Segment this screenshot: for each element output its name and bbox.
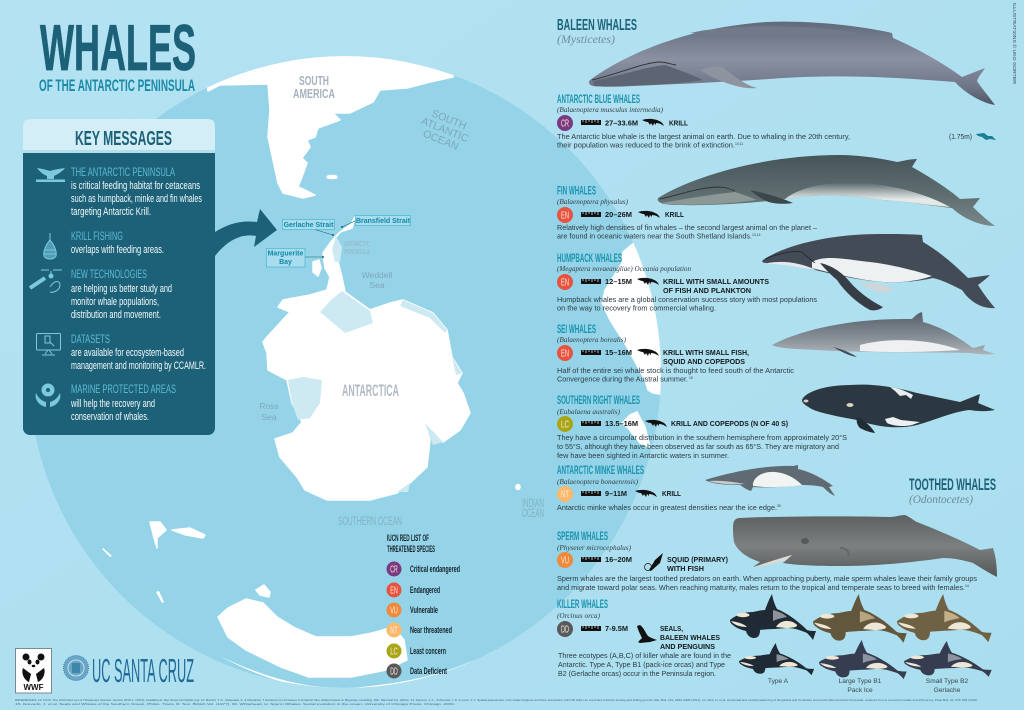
text: new technologies: monitor whale populations,	[71, 296, 159, 308]
label: Ross Sea: Ross	[259, 401, 279, 411]
title	[39, 11, 196, 95]
icon: length ruler	[581, 350, 601, 355]
text block: southern right whale: to 55°S, although they have been observed as far south as 65°S. They are migratory and	[557, 442, 839, 451]
icon: krill	[637, 278, 659, 285]
whale: southern right whale	[802, 385, 995, 433]
label: Weddell Sea: Weddell	[362, 270, 392, 280]
text block: Antarctic minke whale: KRILL	[662, 489, 681, 498]
map: Australia	[218, 599, 407, 677]
callout: Marguerite Bay: Bay	[279, 259, 292, 266]
map: New Zealand	[150, 522, 205, 548]
text block: southern right whale: SOUTHERN RIGHT WHALES	[557, 395, 640, 407]
text block: sperm whale: SPERM WHALES	[557, 531, 608, 543]
legend: near threatened	[386, 622, 452, 638]
text block: Antarctic blue whale: 27–33.6M	[605, 118, 638, 128]
legend: critical endangered: CR	[390, 564, 398, 576]
caption: Type A: Type A	[768, 678, 789, 685]
icon: monitor	[36, 334, 60, 355]
badge: NT	[557, 486, 573, 502]
badge: DD: DD	[561, 624, 569, 636]
badge: EN	[557, 207, 573, 223]
legend: endangered: Endangered	[410, 585, 440, 595]
label: Indian Ocean	[522, 498, 544, 520]
text block: fin whale: 20–26M	[605, 210, 632, 219]
text block: sei whale	[557, 324, 794, 384]
whale: sperm whale	[733, 515, 997, 577]
text block: humpback whale: (Megaptera novaeangliae) Oceania population	[557, 264, 691, 273]
icon: length ruler	[581, 557, 601, 562]
orca: Large Type B1 juvenile	[819, 640, 907, 679]
icon: length ruler	[581, 421, 601, 426]
text: new technologies: distribution and movement.	[71, 309, 161, 321]
text: new technologies: are helping us better study and	[71, 283, 172, 295]
text block: sperm whale: (Physeter microcephalus)	[557, 543, 631, 552]
icon: new technologies	[30, 270, 62, 292]
callout: Marguerite Bay: Marguerite	[268, 250, 303, 258]
icon: krill	[642, 119, 664, 126]
text block: killer whale: SEALS,	[660, 624, 683, 633]
subtitle: OF THE ANTARCTIC PENINSULA	[39, 77, 195, 95]
legend: endangered: EN	[390, 586, 398, 596]
text: the Antarctic Peninsula: is critical feeding habitat for cetaceans	[71, 180, 200, 192]
text block: killer whale: AND PENGUINS	[660, 642, 715, 651]
text: marine protected areas	[70, 382, 176, 423]
text: datasets: are available for ecosystem-based	[71, 347, 184, 359]
text block: sperm whale: 14	[965, 584, 969, 588]
legend: critical endangered	[386, 562, 460, 576]
text block: humpback whale: on the way to recovery from commercial whaling.	[557, 304, 716, 312]
text block: humpback whale: Humpback whales are a global conservation success story with most populations	[557, 295, 817, 304]
text: krill fishing: overlaps with feeding areas.	[71, 244, 164, 256]
orca: Large Type B1 adult	[813, 594, 907, 643]
text block: fin whale: (Balaenoptera physalus)	[557, 197, 628, 206]
whale: fin whale	[658, 155, 995, 226]
badge: LC: LC	[561, 420, 569, 430]
icon: whale tail	[36, 168, 65, 182]
text block: fin whale: FIN WHALES	[557, 186, 596, 198]
text block: sei whale: Half of the entire sei whale stock is thought to feed south of the Antarctic	[557, 366, 794, 375]
text block: Antarctic blue whale: ANTARCTIC BLUE WHALES	[557, 94, 640, 106]
text: datasets: DATASETS	[71, 332, 110, 346]
scale: diver: (1.75m)	[949, 132, 972, 141]
legend: least concern: LC	[390, 646, 398, 658]
label: South Atlantic Ocean: ATLANTIC	[419, 115, 471, 145]
map: Tasmania	[256, 585, 270, 597]
callout: Marguerite Bay	[266, 248, 324, 267]
text block: Antarctic minke whale: ANTARCTIC MINKE WHALES	[557, 465, 644, 477]
text: marine protected areas: will help the recovery and	[70, 398, 155, 410]
references	[15, 698, 978, 706]
legend: vulnerable: Vulnerable	[410, 605, 438, 615]
map: Antarctica	[263, 217, 470, 500]
text block: sperm whale: 16–20M	[605, 555, 632, 564]
text block: sperm whale: WITH FISH	[667, 564, 704, 573]
legend: IUCN red list	[386, 533, 460, 678]
legend: vulnerable: VU	[390, 606, 398, 616]
text block: fin whale: KRILL	[665, 210, 684, 219]
text: datasets	[71, 332, 206, 372]
logo: UC Santa Cruz	[64, 652, 194, 689]
label: Ross Sea: Sea	[261, 412, 277, 422]
credit: illustrations: ILLUSTRATIONS © UKO GORTER	[1011, 3, 1018, 85]
callout: Bransfield Strait: Bransfield Strait	[356, 218, 411, 225]
badge: EN: EN	[561, 348, 569, 360]
whale: humpback whale	[762, 234, 995, 310]
icon: hands and protected area	[36, 384, 60, 407]
legend: data deficient	[386, 664, 447, 678]
text: UC SANTA CRUZ	[92, 652, 194, 689]
heading: baleen whales: BALEEN WHALES	[557, 17, 637, 34]
text block: southern right whale: (Eubalaena australis)	[557, 407, 620, 416]
text block: sperm whale: SQUID (PRIMARY)	[667, 555, 728, 564]
panel: key messages	[23, 119, 215, 435]
text block: Antarctic blue whale: (Balaenoptera musculus intermedia)	[557, 105, 663, 114]
badge: CR	[557, 115, 573, 131]
text block: killer whale: Antarctic. Type A, Type B1 (pack-ice orcas) and Type	[558, 660, 725, 669]
heading: baleen whales	[557, 17, 637, 46]
arrow to the peninsula	[215, 209, 277, 256]
text block: humpback whale: KRILL WITH SMALL AMOUNTS	[663, 277, 769, 286]
text block: sei whale: Convergence during the Austral summer.	[557, 374, 688, 384]
icon: length ruler	[581, 626, 601, 631]
label: Weddell Sea	[362, 270, 392, 290]
callout: Bransfield Strait	[341, 216, 411, 228]
text: datasets: management and monitoring by CCAMLR.	[71, 360, 206, 372]
badge: NT: NT	[561, 490, 569, 500]
text block: Antarctic minke whale: 30	[777, 504, 781, 508]
badge: CR: CR	[561, 118, 569, 130]
map: Falkland Islands	[327, 176, 337, 178]
label: Antarctic Peninsula	[344, 241, 370, 256]
label: Antarctica: ANTARCTICA	[342, 382, 399, 400]
references: 15. Acevedo, J. et al. Seals and Whales of the Southern Ocean. Philos. Trans. R. Soc. British Vol. (1977). 30. Whitehead, H. Sperm Whales. Social evolution in the ocean. University of Chicago Press, Chicago. 2003.	[15, 702, 455, 706]
callout: Gerlache Strait	[282, 220, 334, 236]
icon: length ruler	[581, 212, 601, 217]
icon: krill	[645, 420, 667, 427]
badge: EN	[557, 345, 573, 361]
map: southern coast crescent	[102, 548, 474, 691]
text block: humpback whale	[557, 253, 817, 312]
title: WHALES	[40, 11, 196, 84]
callout: Gerlache Strait: Gerlache Strait	[284, 222, 334, 229]
whale: Antarctic blue whale	[589, 22, 995, 105]
label: Weddell Sea: Sea	[369, 280, 385, 290]
icon: seal	[637, 625, 657, 643]
logo: WWF: WWF	[24, 683, 44, 692]
orcas: killer whale ecotypes	[730, 594, 992, 694]
caption: Small Type B2: Small Type B2	[926, 678, 969, 685]
badge: DD	[557, 621, 573, 637]
badge: VU	[557, 552, 573, 568]
text block: sperm whale: Sperm whales are the largest toothed predators on earth. When approaching puberty, male sperm whales leave their family groups	[557, 574, 977, 583]
text block: humpback whale: OF FISH AND PLANKTON	[663, 286, 751, 295]
icon: krill	[638, 211, 660, 218]
text block: killer whale: Three ecotypes (A,B,C) of killer whale are found in the	[558, 651, 731, 660]
text block: humpback whale: 12–15M	[605, 277, 632, 286]
legend: data deficient: Data Deficient	[410, 666, 447, 676]
badge: EN: EN	[561, 278, 569, 288]
text block: sei whale: 15	[689, 376, 693, 380]
text: the Antarctic Peninsula: THE ANTARCTIC PENINSULA	[71, 165, 175, 179]
orca: Small Type B2 juvenile	[904, 641, 992, 677]
text block: Antarctic blue whale: The Antarctic blue whale is the largest animal on earth. Due to whaling in the 20th century,	[557, 132, 850, 141]
orca: Small Type B2 adult	[897, 594, 992, 642]
icon: krill net	[44, 233, 56, 259]
text block: sperm whale: and migrate toward polar seas. When reaching maturity, males return to the tropical and temperate seas to breed with females.	[557, 583, 965, 592]
badge: VU: VU	[561, 556, 569, 566]
text: the Antarctic Peninsula	[71, 165, 202, 218]
legend heading: IUCN RED LIST OF	[387, 533, 429, 544]
badge: EN	[557, 274, 573, 290]
label: Indian Ocean: INDIAN	[522, 498, 544, 510]
label: South Atlantic Ocean: OCEAN	[421, 128, 460, 153]
text: the Antarctic Peninsula: such as humpback, minke and fin whales	[71, 193, 202, 205]
text block: Antarctic blue whale	[557, 94, 850, 150]
text block: sei whale: (Balaenoptera borealis)	[557, 335, 626, 344]
label: South America: AMERICA	[293, 86, 335, 101]
caption: Small Type B2: Gerlache	[934, 687, 961, 694]
text block: killer whale	[557, 599, 731, 678]
map labels	[259, 73, 544, 528]
orca: Type A adult	[730, 594, 816, 640]
icon: krill	[637, 349, 659, 356]
label: South America	[293, 73, 335, 101]
text block: Antarctic minke whale: 9–11M	[605, 489, 627, 498]
text block: sei whale: SEI WHALES	[557, 324, 596, 336]
label: Ross Sea	[259, 401, 279, 422]
text block: sei whale: KRILL WITH SMALL FISH,	[663, 348, 749, 357]
map: ice shelves	[288, 236, 462, 492]
text block: sei whale: 15–16M	[605, 348, 632, 357]
icon: length ruler	[581, 120, 601, 125]
label: Southern Ocean: SOUTHERN OCEAN	[338, 516, 402, 528]
text block: southern right whale: They have a circumpolar distribution in the southern hemisphere from approximately 20°S	[557, 433, 847, 442]
label: Indian Ocean: OCEAN	[522, 508, 544, 520]
text: marine protected areas: MARINE PROTECTED AREAS	[71, 382, 176, 396]
text block: sei whale: SQUID AND COPEPODS	[663, 357, 745, 366]
text block: fin whale: are found in oceanic waters near the South Shetland Islands.	[557, 232, 752, 241]
references: REFERENCES: 10. IUCN. The IUCN Red List of Threatened Species. Version 2019-1. (2019). Available at: http://www.iucnredlist.org/. 11. Branch, T. A., Matsuoka, K. & Miyashita, T. Evidence for increases in Antarctic blue whales based on Bayesian modelling. Mar. Mammal Sci. (2004). 13. Santora, J. A., Schroeder, I. D. & Loeb, V. J. Spatial assessment of fin whale hotspots and their association with krill within an important Antarctic feeding and fishing ground. Mar. Biol. 161, 2293–2305 (2014). 14. Weir, H. et al. Horizontal and vertical patterning of humpback and fin whales around the West Antarctic Peninsula: evidence from a concurrent whale and krill survey. Polar Biol. 33, 979–993 (2010).	[15, 698, 978, 702]
text block: southern right whale: KRILL AND COPEPODS (N OF 40 S)	[671, 419, 788, 428]
text block: killer whale: 7-9.5M	[605, 624, 628, 633]
orca: Type A juvenile	[739, 643, 814, 675]
legend heading	[387, 533, 435, 555]
text block: southern right whale	[557, 395, 847, 460]
icon: length ruler	[581, 279, 601, 284]
text: krill fishing: KRILL FISHING	[71, 229, 123, 243]
legend: endangered	[386, 582, 440, 598]
text block: killer whale: KILLER WHALES	[557, 599, 608, 611]
text block: sperm whale	[557, 531, 977, 592]
legend: least concern	[386, 644, 446, 658]
text: marine protected areas: conservation of whales.	[71, 411, 149, 423]
map: globe of the Southern Ocean	[36, 56, 661, 688]
badge: LC	[557, 416, 573, 432]
label: Antarctic Peninsula: ANTARCTIC	[344, 241, 370, 248]
text block: fin whale: Relatively high densities of fin whales – the second largest animal on the planet –	[557, 223, 818, 232]
text: the Antarctic Peninsula: targeting Antarctic Krill.	[71, 206, 151, 218]
logo: WWF	[16, 648, 52, 693]
badge: EN: EN	[561, 210, 569, 222]
label: South Atlantic Ocean: SOUTH	[430, 108, 468, 132]
icon: squid	[644, 553, 663, 571]
caption: Small Type B2	[926, 678, 969, 694]
text: new technologies	[71, 267, 172, 321]
whale: sei whale	[772, 312, 995, 357]
label: South Atlantic Ocean	[415, 105, 475, 155]
text block: Antarctic blue whale: 10,11	[735, 142, 743, 146]
icon: krill	[635, 490, 657, 497]
heading: toothed whales: (Odontocetes)	[909, 492, 973, 506]
legend: vulnerable	[386, 602, 438, 618]
legend: data deficient: DD	[390, 666, 398, 678]
map: Africa	[601, 242, 661, 395]
whale: Antarctic minke whale	[705, 465, 835, 496]
caption: Large Type B1	[839, 678, 882, 694]
label: South America: SOUTH	[299, 73, 329, 88]
text block: Antarctic minke whale	[557, 465, 781, 512]
text block: fin whale	[557, 186, 818, 241]
heading: baleen whales: (Mysticetes)	[557, 34, 615, 46]
legend: least concern: Least concern	[410, 646, 446, 656]
heading: toothed whales	[909, 475, 996, 506]
text block: killer whale: (Orcinus orca)	[557, 611, 600, 620]
text block: Antarctic minke whale: Antarctic minke whales occur in greatest densities near the ice edge.	[557, 503, 777, 512]
label: Antarctic Peninsula: PENINSULA	[344, 249, 370, 256]
caption: Large Type B1: Pack Ice	[847, 687, 873, 694]
text block: Antarctic blue whale: their population was reduced to the brink of extinction.	[557, 140, 735, 150]
legend: IUCN red list: THREATENED SPECIES	[387, 544, 435, 555]
text block: fin whale: 13,14	[752, 233, 761, 237]
text block: southern right whale: 13.5–16M	[605, 419, 638, 428]
text block: killer whale: BALEEN WHALES	[660, 633, 720, 642]
heading: key messages: KEY MESSAGES	[75, 128, 172, 150]
caption: Large Type B1: Large Type B1	[839, 678, 882, 685]
text block: Antarctic minke whale: (Balaenoptera bonaerensis)	[557, 477, 638, 486]
map: Indian Ocean island	[516, 484, 520, 490]
text block: Antarctic blue whale: KRILL	[669, 118, 688, 128]
text block: humpback whale: HUMPBACK WHALES	[557, 253, 622, 265]
text block: southern right whale: few have been sighted in Antarctic waters in summer.	[557, 451, 729, 460]
map: Alexander Island	[313, 260, 321, 276]
scale: diver	[949, 132, 996, 141]
icon: length ruler	[581, 491, 601, 496]
text: new technologies: NEW TECHNOLOGIES	[71, 267, 147, 281]
legend: near threatened: Near threatened	[410, 625, 452, 635]
legend: critical endangered: Critical endangered	[410, 564, 460, 574]
map: South America	[206, 56, 454, 199]
text block: killer whale: B2 (Gerlache orcas) occur in the Peninsula region.	[558, 669, 716, 678]
text: krill fishing	[71, 229, 164, 256]
map: Madagascar	[622, 412, 650, 447]
legend: near threatened: NT	[390, 626, 398, 636]
